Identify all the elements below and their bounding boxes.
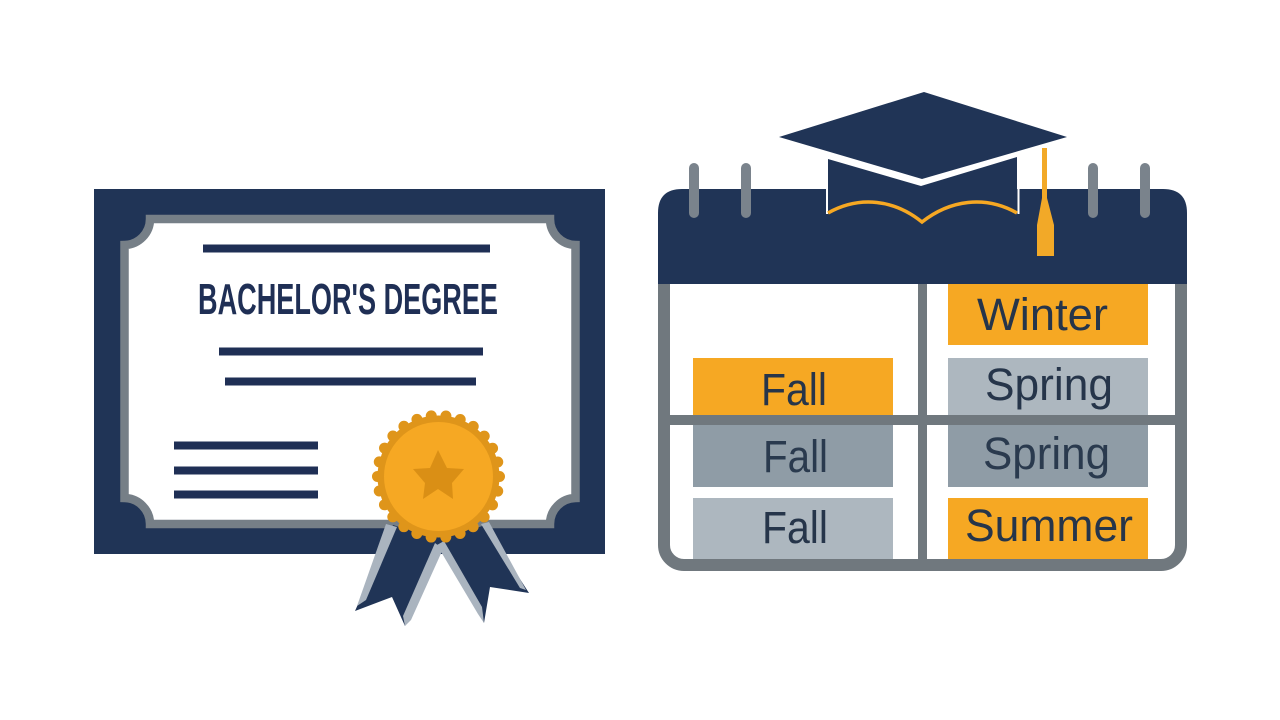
cell: Winter: Winter [977,289,1108,340]
diploma signature lines [174,442,318,498]
panel: calendar [658,163,1187,565]
seal scalloped edge [378,416,500,538]
calendar body [664,200,1181,565]
diploma heading: BACHELOR'S DEGREE [198,275,498,324]
cell: Summer: Summer [965,500,1133,551]
diploma body lines [219,348,483,386]
cell: Fall mid grey [693,424,893,487]
diploma top line [203,244,490,252]
cap base [828,157,1017,222]
cell: Fall orange: Fall [761,364,827,415]
icon: star [413,450,464,499]
calendar binder rings [689,163,1150,218]
icon: rosette ribbon seal [355,416,529,626]
cap board [779,92,1067,179]
icon: graduation cap [779,92,1067,256]
cell: Winter [948,284,1148,345]
seal face [384,422,493,531]
cap side highlights [827,188,1018,214]
panel: diploma certificate [94,189,605,554]
cell: Spring light [948,358,1148,416]
cell: Fall light [693,498,893,559]
cell: Fall light: Fall [762,502,828,553]
calendar vertical grid line [918,284,927,560]
diploma navy frame [94,189,605,554]
cell: Fall orange [693,358,893,416]
cap white edge [828,154,1018,183]
ribbon tails [355,522,529,626]
cap tassel [1037,148,1054,256]
calendar horizontal grid line [668,415,1177,425]
calendar header band [658,189,1187,284]
cell: Spring light: Spring [985,359,1113,410]
cell: Fall mid grey: Fall [763,431,828,482]
cap gold trim [828,202,1017,222]
diploma paper with notched corners [124,219,576,524]
cell: Spring mid grey: Spring [983,428,1110,479]
cell: Spring mid grey [948,424,1148,487]
